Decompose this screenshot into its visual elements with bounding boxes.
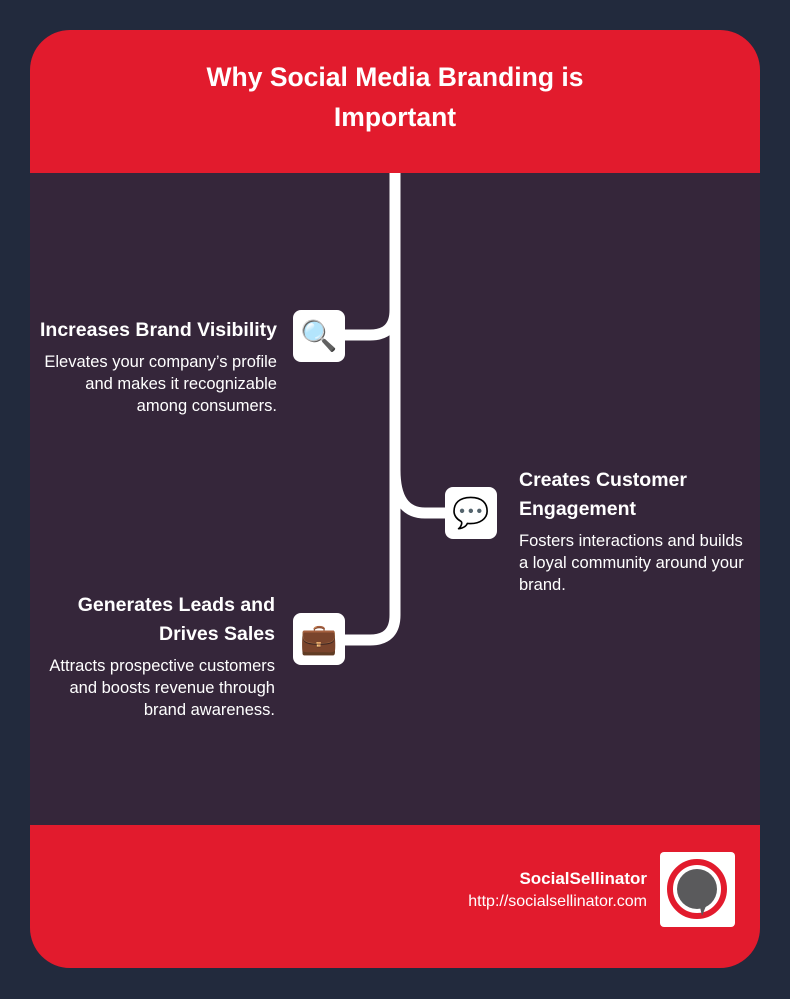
icon: magnifier: 🔍 (300, 320, 338, 352)
icon: briefcase (293, 613, 345, 665)
logo (660, 852, 735, 927)
item: brand visibility: and makes it recognizable (85, 375, 277, 393)
title (206, 62, 583, 132)
item: customer engagement: Fosters interactions and builds (519, 532, 743, 550)
icon: speech bubble: 💬 (452, 496, 490, 530)
item: brand visibility: among consumers. (137, 397, 277, 415)
title: Why Social Media Branding is (207, 62, 583, 92)
item: leads and sales: Generates Leads and (78, 594, 275, 616)
item: brand visibility: Elevates your company’s profile (44, 353, 277, 371)
item: customer engagement: Creates Customer (519, 469, 687, 491)
item: leads and sales: brand awareness. (144, 701, 275, 719)
icon: speech bubble (445, 487, 497, 539)
item: leads and sales: Drives Sales (159, 623, 275, 645)
item: leads and sales (49, 594, 275, 719)
item: brand visibility (40, 319, 277, 415)
item: brand visibility: Increases Brand Visibility (40, 319, 277, 341)
item: customer engagement (519, 469, 744, 594)
item: leads and sales: and boosts revenue through (70, 679, 275, 697)
title: Important (334, 102, 456, 132)
icon: briefcase: 💼 (300, 622, 338, 656)
icon: magnifier (293, 310, 345, 362)
item: customer engagement: brand. (519, 576, 566, 594)
header band (30, 30, 760, 173)
item: customer engagement: Engagement (519, 498, 636, 520)
brand text: http://socialsellinator.com (468, 893, 647, 910)
brand text (468, 869, 647, 910)
brand text: SocialSellinator (519, 869, 647, 888)
footer band (30, 825, 760, 968)
item: leads and sales: Attracts prospective customers (49, 657, 275, 675)
item: customer engagement: a loyal community around your (519, 554, 744, 572)
